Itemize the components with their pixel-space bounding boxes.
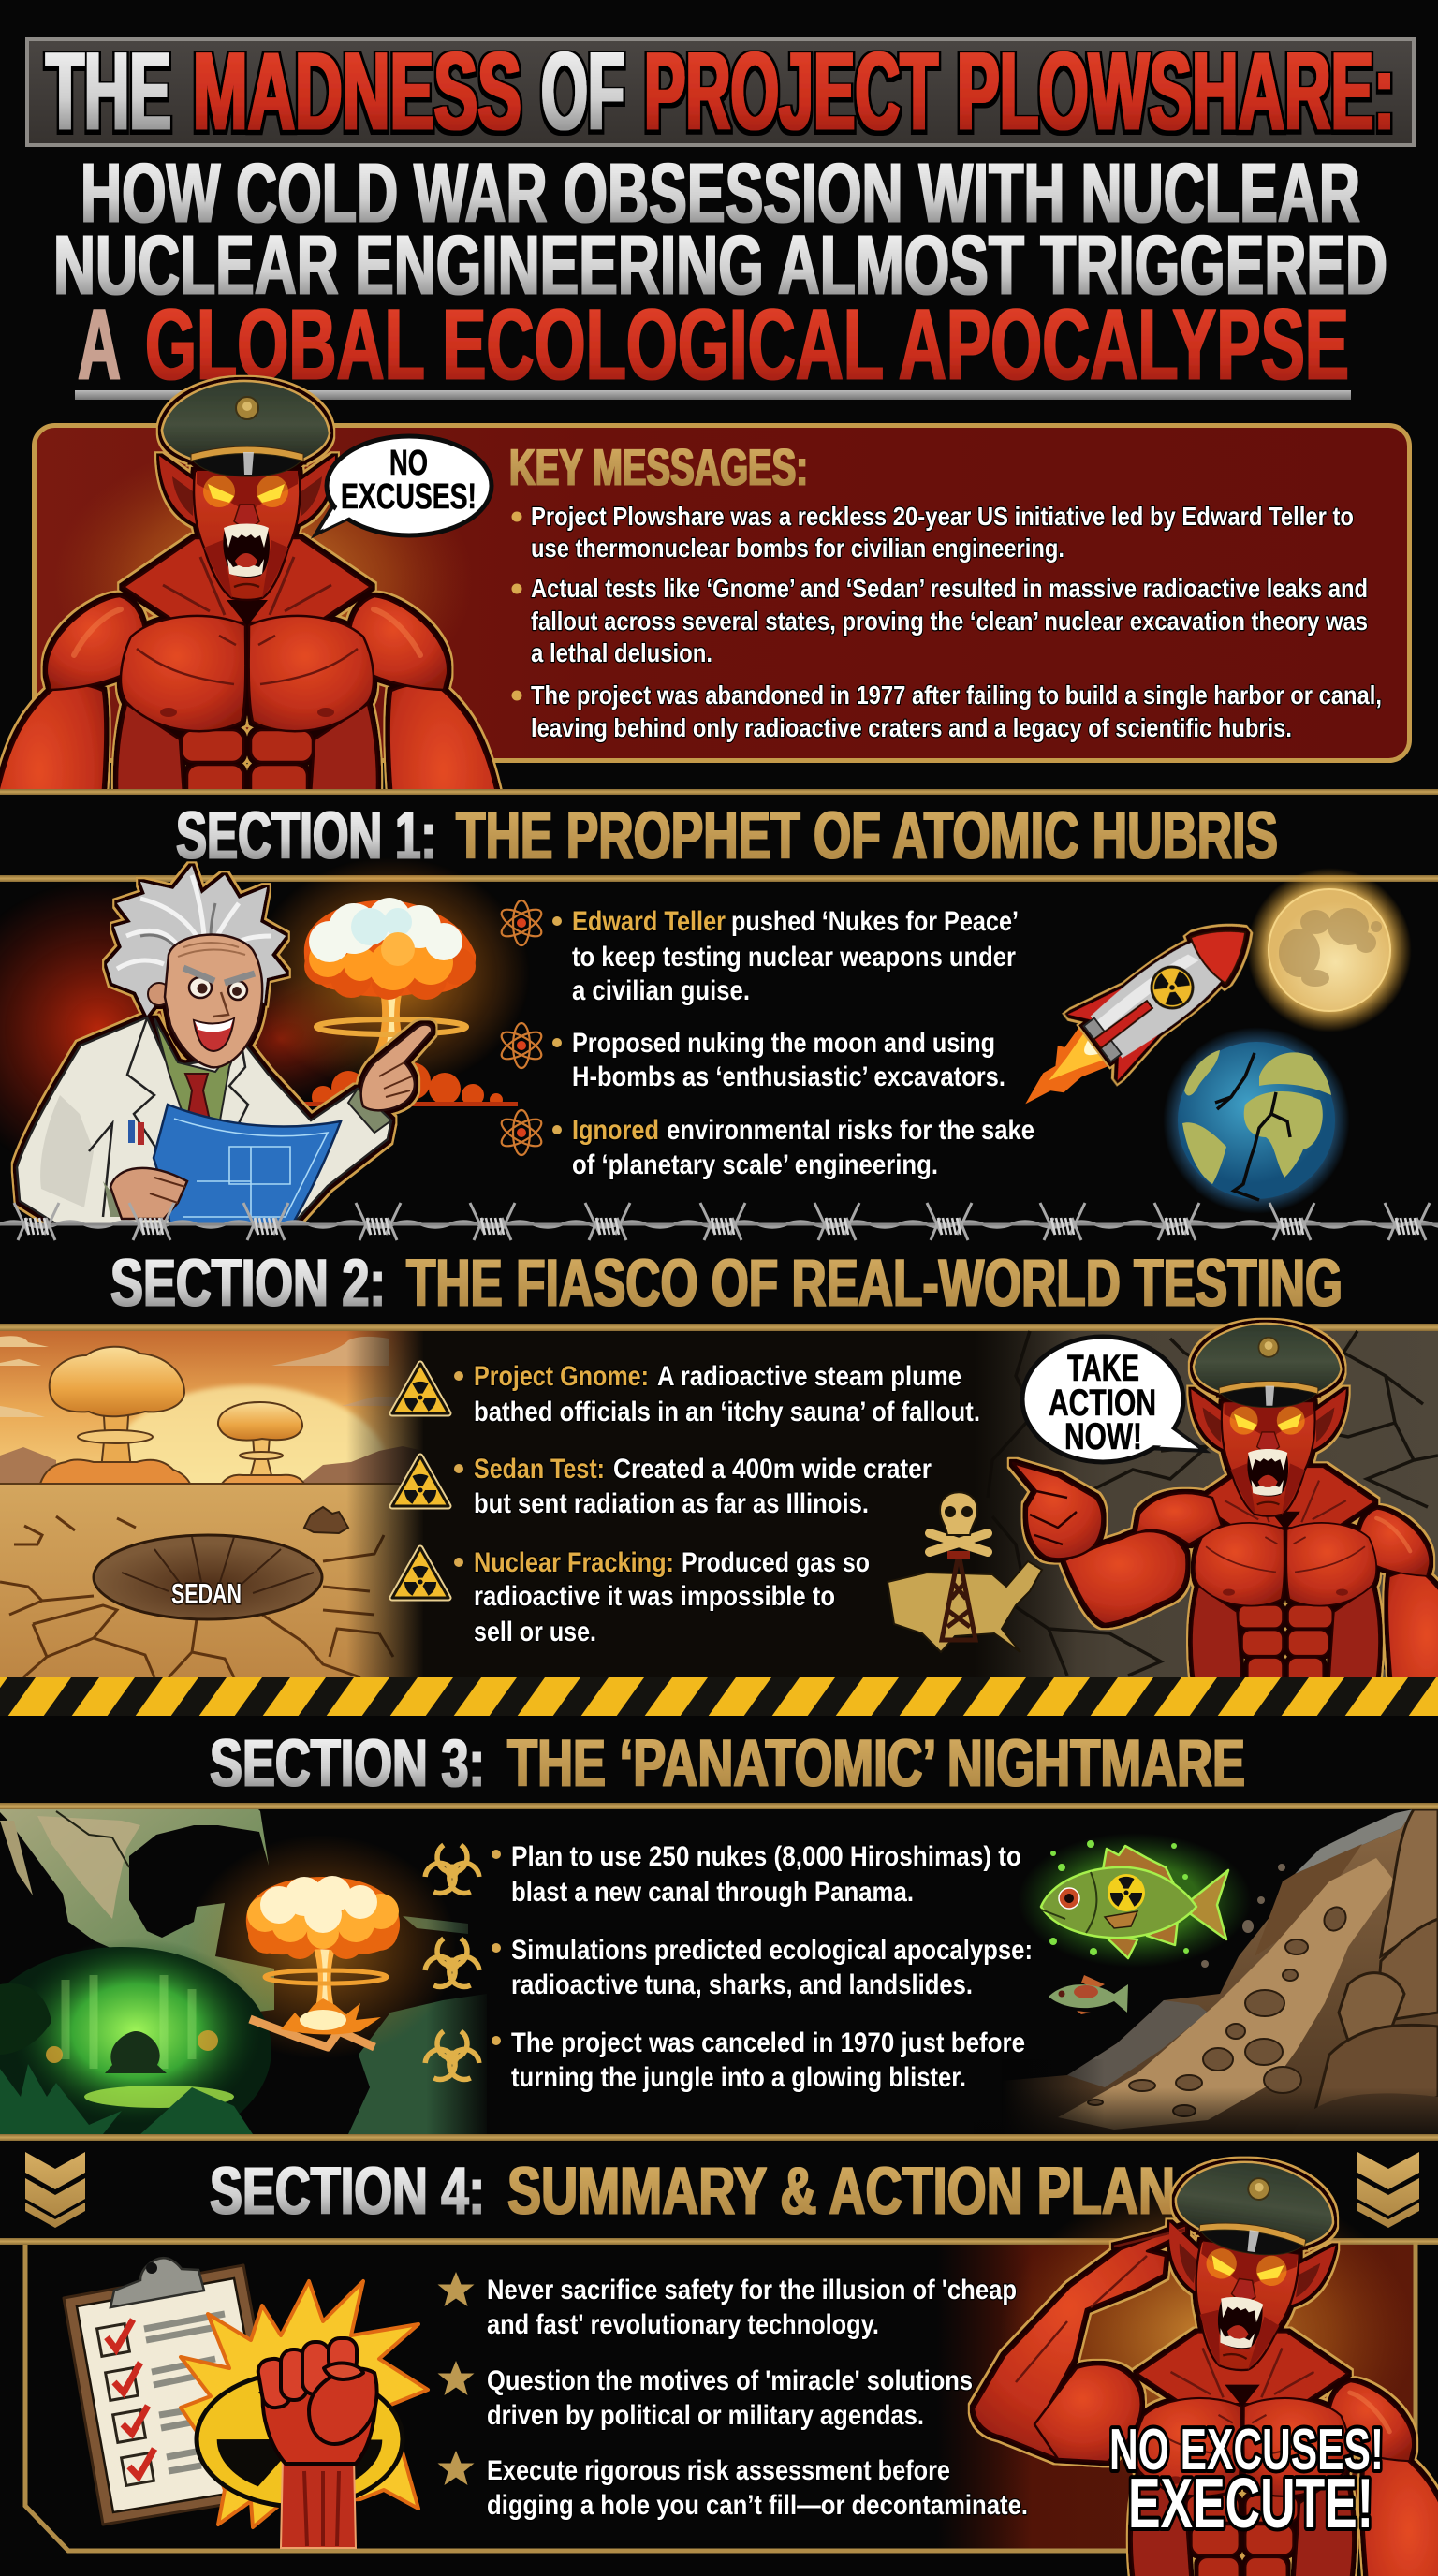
subtitle: A	[78, 287, 121, 401]
illustration: devil officer pointing	[1007, 1318, 1438, 1677]
text: section 2 bullets: Project Gnome:	[474, 1361, 649, 1392]
illustration: Central America map with blast and glowing jungle	[0, 1809, 485, 2134]
text: section 4 action list: Execute rigorous risk assessment before	[487, 2455, 950, 2486]
barbed wire divider	[0, 1203, 1438, 1240]
heading: section 4: SUMMARY & ACTION PLAN	[507, 2155, 1175, 2229]
heading: section 1	[176, 799, 1278, 873]
title plate: THE	[46, 30, 171, 154]
text: section 1 bullets: H-bombs as ‘enthusiastic’ excavators.	[572, 1061, 1005, 1092]
text: section 3 bullets: The project was canceled in 1970 just before	[511, 2027, 1025, 2058]
heading: section 1: SECTION 1:	[176, 799, 436, 873]
text: key message bullets: leaving behind only radioactive craters and a legacy of scientific hubris.	[531, 713, 1292, 742]
subtitle	[53, 147, 1387, 401]
illustration: nuclear rocket	[998, 900, 1270, 1134]
heading: section 4	[210, 2155, 1175, 2229]
text: section 3 bullets: turning the jungle into a glowing blister.	[511, 2062, 966, 2093]
text: section 1 bullets: environmental risks for the sake	[667, 1115, 1034, 1146]
text: key message bullets: use thermonuclear bombs for civilian engineering.	[531, 534, 1064, 563]
text: section 2 bullets	[392, 1361, 980, 1647]
illustration: desert test site with mushroom clouds and Sedan crater	[0, 1331, 424, 1677]
icon: biohazard	[422, 1939, 482, 1991]
text: section 2 bullets: Sedan Test:	[474, 1454, 605, 1485]
panel: section 2 background	[0, 1331, 1438, 1677]
icon: chevrons right	[1357, 2152, 1419, 2228]
title plate: PROJECT	[644, 30, 938, 154]
text: section 2 bullets: A radioactive steam plume	[657, 1361, 961, 1392]
title plate: OF	[541, 30, 624, 154]
text: section 3 bullets	[422, 1841, 1033, 2093]
panel: section 4 frame	[25, 2181, 1416, 2551]
title plate	[27, 30, 1414, 154]
illustration: devil officer with fiery glow	[0, 374, 503, 789]
heading: key messages: KEY MESSAGES:	[509, 438, 808, 496]
speech bubble: no excuses	[315, 436, 492, 535]
text: section 2 bullets: bathed officials in an ‘itchy sauna’ of fallout.	[474, 1397, 980, 1427]
icon: radiation warning	[392, 1364, 448, 1413]
speech bubble: no excuses: NO	[389, 444, 428, 483]
icon: radiation warning	[392, 1548, 448, 1598]
icon: atom	[498, 1110, 545, 1155]
text: section 4 action list: and fast' revolutionary technology.	[487, 2309, 879, 2340]
icon: skull, US map and oil derrick	[888, 1492, 1042, 1652]
text: section 3 bullets: radioactive tuna, sharks, and landslides.	[511, 1969, 973, 2000]
illustration: devil officer saluting	[974, 2152, 1438, 2576]
text: section 1 bullets: pushed ‘Nukes for Peace’	[731, 906, 1019, 937]
text: section 1 bullets: Proposed nuking the moon and using	[572, 1028, 995, 1059]
text: section 1 bullets: a civilian guise.	[572, 975, 750, 1006]
divider gold	[0, 789, 1438, 795]
illustration: radioactive fish	[1018, 1833, 1252, 1968]
text: section 4 action list: Question the motives of 'miracle' solutions	[487, 2365, 973, 2396]
illustration: Edward Teller scientist	[17, 866, 432, 1226]
icon: biohazard	[422, 1845, 482, 1897]
text: section 4 action list	[438, 2272, 1028, 2521]
speech bubble: take action now	[1022, 1337, 1205, 1462]
heading: section 3	[210, 1727, 1245, 1801]
text: key message bullets	[511, 502, 1382, 742]
text: section 2 bullets: but sent radiation as far as Illinois.	[474, 1488, 869, 1519]
illustration: raised fist with radiation symbol	[181, 2281, 428, 2548]
heading: section 2: SECTION 2:	[110, 1247, 386, 1321]
text: section 4 action list: Never sacrifice safety for the illusion of 'cheap	[487, 2275, 1017, 2305]
icon: radiation warning	[392, 1456, 448, 1506]
text: section 2 bullets: Created a 400m wide crater	[613, 1454, 932, 1485]
icon: star	[438, 2451, 474, 2485]
icon: atom	[498, 900, 545, 945]
text: section 1 bullets	[498, 900, 1034, 1180]
illustration: landslide	[974, 1809, 1438, 2134]
text: section 3 bullets: Plan to use 250 nukes (8,000 Hiroshimas) to	[511, 1841, 1021, 1872]
hazard stripe divider	[0, 1677, 1438, 1716]
heading: section 4: SECTION 4:	[210, 2155, 485, 2229]
text: section 4 action list: digging a hole you can’t fill—or decontaminate.	[487, 2490, 1028, 2521]
icon: biohazard	[422, 2031, 482, 2084]
title plate: MADNESS	[193, 30, 521, 154]
text: section 1 bullets: to keep testing nuclear weapons under	[572, 942, 1016, 973]
icon: atom	[498, 1023, 545, 1068]
panel: key messages	[34, 425, 1410, 760]
text: key message bullets: a lethal delusion.	[531, 638, 712, 667]
text: section 1 bullets: Ignored	[572, 1115, 659, 1146]
heading: section 3: SECTION 3:	[210, 1727, 485, 1801]
illustration: moon	[1247, 868, 1412, 1032]
illustration: cracked earth	[1163, 1027, 1350, 1214]
speech bubble: take action now: ACTION	[1049, 1383, 1156, 1424]
text: section 3 bullets: Simulations predicted ecological apocalypse:	[511, 1935, 1033, 1966]
text: section 2 bullets: Produced gas so	[682, 1547, 870, 1578]
illustration: clipboard checklist	[64, 2258, 286, 2525]
speech bubble: take action now: TAKE	[1067, 1348, 1139, 1389]
text: section 2 bullets: sell or use.	[474, 1617, 596, 1647]
illustration: desert test site with mushroom clouds and Sedan crater: SEDAN	[171, 1577, 242, 1610]
illustration: mushroom cloud section 1	[0, 856, 531, 1179]
speech bubble: no excuses: EXCUSES!	[341, 477, 477, 517]
text: section 2 bullets: radioactive it was impossible to	[474, 1581, 835, 1612]
text: section 1 bullets: Edward Teller	[572, 906, 726, 937]
icon: chevrons left	[25, 2152, 85, 2228]
illustration: small mutated fish	[1049, 1975, 1128, 2014]
subtitle rule	[75, 390, 1351, 400]
callout: no excuses execute	[1109, 2418, 1384, 2542]
icon: star	[438, 2272, 474, 2306]
icon: star	[438, 2361, 474, 2395]
text: section 2 bullets: Nuclear Fracking:	[474, 1547, 674, 1578]
speech bubble: take action now: NOW!	[1064, 1416, 1142, 1457]
text: section 4 action list: driven by political or military agendas.	[487, 2400, 924, 2431]
text: section 3 bullets: blast a new canal through Panama.	[511, 1877, 914, 1908]
text: section 1 bullets: of ‘planetary scale’ engineering.	[572, 1149, 938, 1180]
